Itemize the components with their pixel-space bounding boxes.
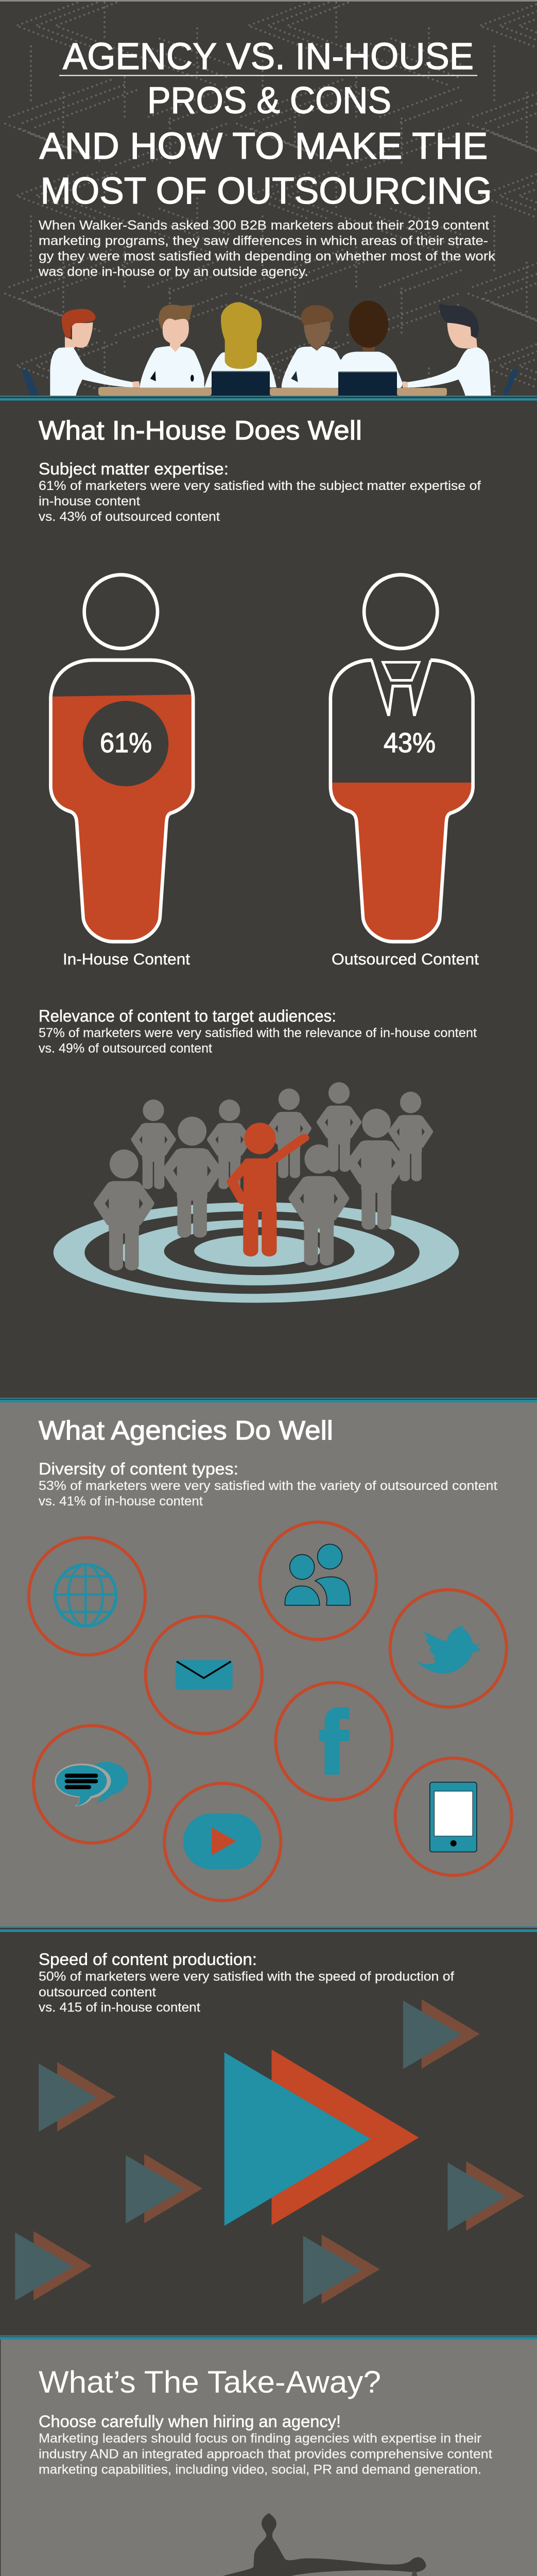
front figures (99, 1144, 344, 1265)
text: diversity of content (39, 1460, 497, 1509)
text: subject matter expertise: vs. 43% of outsourced content (39, 510, 220, 524)
title (39, 36, 492, 212)
intro paragraph: marketing programs, they saw differences in which areas of their strate- (39, 234, 488, 248)
icon: facebook (275, 1683, 392, 1800)
divider band (0, 1926, 537, 1932)
icon: globe (29, 1538, 145, 1655)
text: speed of content: vs. 415 of in-house content (39, 2001, 200, 2015)
text: subject matter expertise: Subject matter expertise: (39, 460, 229, 478)
text: choose carefully (39, 2412, 492, 2477)
chart: in-house person 61% (50, 575, 193, 968)
intro paragraph: was done in-house or by an outside agency. (38, 265, 308, 279)
arrows: fast-forward triangles (15, 1999, 524, 2304)
section heading: What In-House Does Well (39, 416, 362, 446)
left people (22, 304, 204, 396)
text: relevance of content: 57% of marketers were very satisfied with the relevance of in-house content (39, 1026, 477, 1040)
chart: outsourced person 43% (331, 575, 479, 968)
icon: people (260, 1522, 376, 1639)
text: relevance of content: vs. 49% of outsourced content (39, 1041, 212, 1056)
target rings (54, 1202, 459, 1303)
text: speed of content: outsourced content (39, 1985, 156, 1999)
text: diversity of content: vs. 41% of in-house content (39, 1494, 203, 1509)
title: PROS & CONS (147, 80, 391, 122)
crowd figures (135, 1082, 429, 1232)
text: subject matter expertise: 61% of marketers were very satisfied with the subject matter expertise of (39, 479, 481, 493)
icon: chat bubbles (33, 1726, 150, 1843)
text: speed of content: 50% of marketers were very satisfied with the speed of production of (39, 1969, 454, 1984)
illustration: tilted balance scale (29, 2513, 510, 2576)
highlighted red figure (232, 1123, 304, 1251)
text: subject matter expertise: in-house content (39, 494, 140, 509)
section heading: What’s The Take-Away? (39, 2365, 381, 2399)
centre person, blonde (204, 352, 276, 387)
icon: video play (164, 1783, 281, 1901)
large play triangle (224, 2049, 419, 2226)
table (98, 387, 447, 396)
intro paragraph: When Walker-Sands asked 300 B2B marketers about their 2019 content (39, 218, 489, 232)
text: speed of content (39, 1950, 454, 2015)
panel: what in-house does well (39, 416, 481, 1303)
text: choose carefully: industry AND an integrated approach that provides comprehensive content (39, 2447, 492, 2461)
intro paragraph (38, 218, 496, 279)
text: subject matter expertise (39, 460, 481, 524)
chart: in-house person 61%: 61% (100, 727, 152, 758)
text: diversity of content: Diversity of content types: (39, 1460, 238, 1478)
panel: what agencies do well (0, 1402, 537, 1926)
title: MOST OF OUTSOURCING (40, 171, 492, 212)
text: choose carefully: Choose carefully when hiring an agency! (39, 2412, 341, 2431)
chart: outsourced person 43%: 43% (384, 727, 436, 758)
panel: what's the take-away (0, 2340, 537, 2576)
icon: envelope (146, 1616, 262, 1734)
icon: twitter bird (390, 1590, 507, 1707)
text: diversity of content: 53% of marketers were very satisfied with the variety of outsourced content (39, 1479, 497, 1493)
panel: speed of content production (15, 1950, 524, 2304)
scale strings (58, 2571, 474, 2576)
section heading: What Agencies Do Well (39, 1416, 333, 1446)
illustration: team around table (22, 301, 519, 396)
right people (282, 301, 519, 396)
header dotted pattern background (0, 2, 537, 396)
laptops (212, 371, 397, 396)
intro paragraph: gy they were most satisfied with depending on whether most of the work (39, 249, 496, 264)
text: choose carefully: Marketing leaders should focus on finding agencies with expertise in their (39, 2431, 481, 2446)
chart: outsourced person 43%: Outsourced Content (332, 950, 479, 968)
divider band (0, 1398, 537, 1402)
divider band (0, 396, 537, 401)
scale beam and pole top (111, 2513, 426, 2576)
icon circles (29, 1522, 512, 1901)
text: choose carefully: marketing capabilities, including video, social, PR and demand generation. (39, 2463, 481, 2477)
panel: header (0, 0, 537, 396)
chart: in-house person 61%: In-House Content (63, 950, 190, 968)
text: speed of content: Speed of content production: (39, 1950, 257, 1969)
text: relevance of content (39, 1007, 477, 1056)
text: relevance of content: Relevance of content to target audiences: (39, 1007, 336, 1025)
icon: tablet (395, 1758, 512, 1875)
title: AGENCY VS. IN-HOUSE (63, 36, 474, 77)
faded small triangles (15, 1999, 524, 2304)
title: AND HOW TO MAKE THE (39, 126, 488, 167)
illustration: target audience crowd (54, 1082, 459, 1303)
divider band (0, 2335, 537, 2340)
